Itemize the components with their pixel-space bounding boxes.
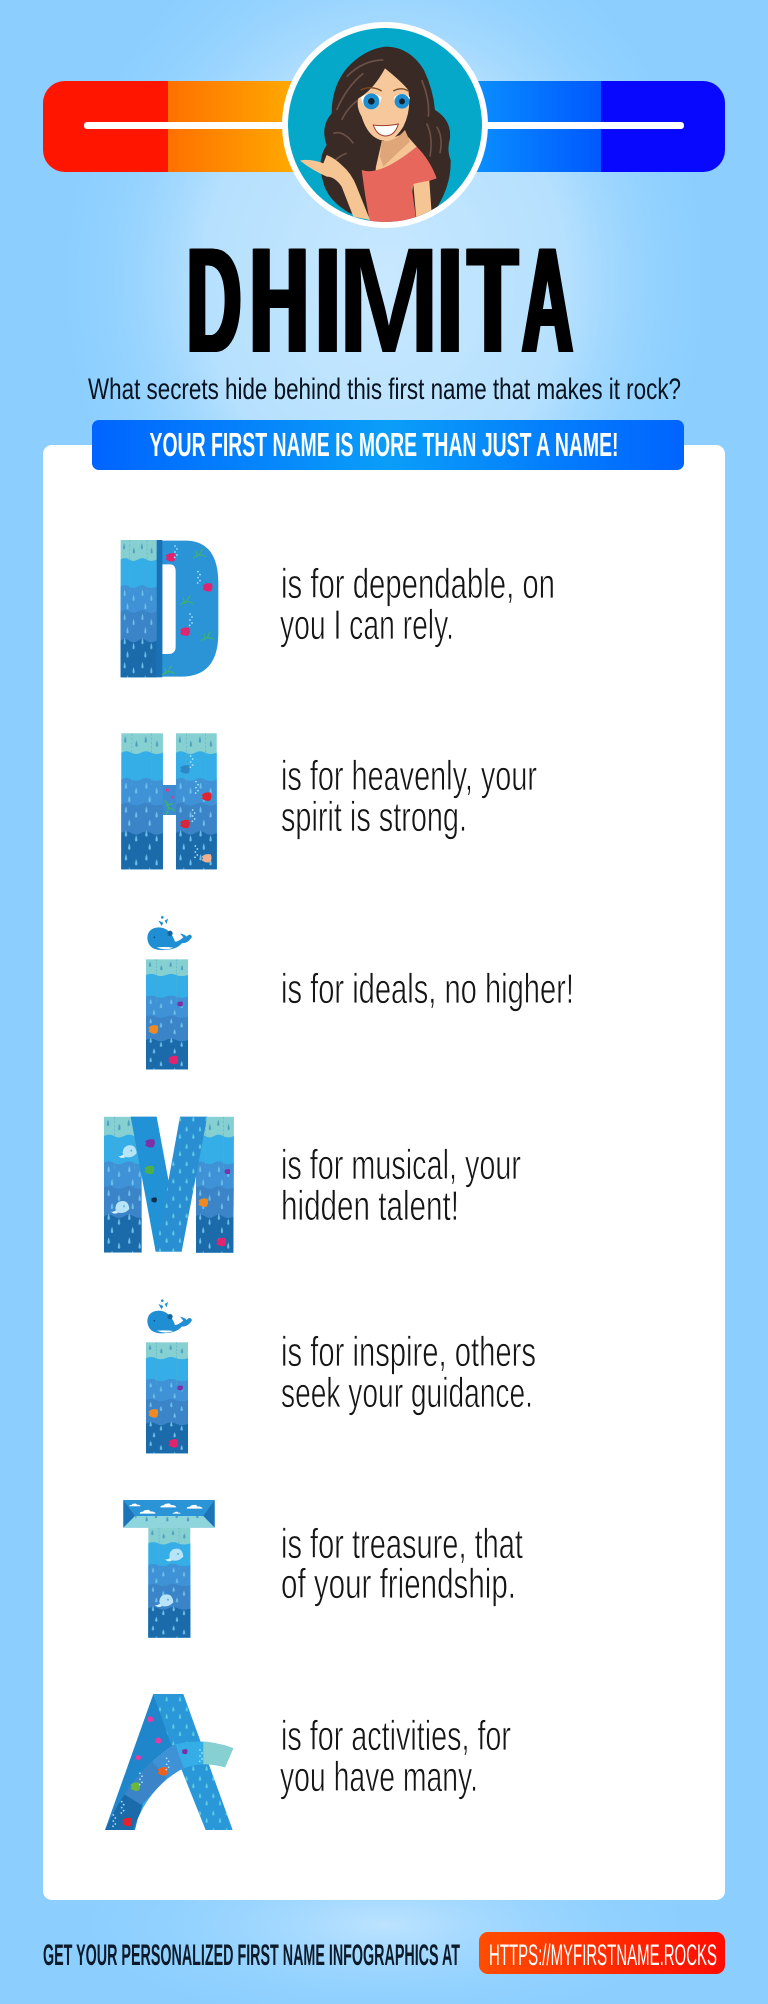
letter T text: is for treasure, that	[281, 1520, 523, 1567]
letter M text: is for musical, your	[281, 1141, 521, 1188]
second letter I text: is for inspire, others	[281, 1328, 536, 1375]
letter D text: you I can rely.	[280, 601, 454, 648]
letter I with whale	[146, 916, 192, 1069]
title: T	[468, 216, 517, 384]
letter T text	[281, 1520, 523, 1607]
letter H text: is for heavenly, your	[281, 752, 537, 799]
letter A text: you have many.	[280, 1753, 478, 1800]
letter A text: is for activities, for	[281, 1712, 511, 1759]
banner	[92, 420, 684, 470]
letter H	[121, 733, 217, 869]
letter D text: is for dependable, on	[281, 560, 555, 607]
letter H text	[281, 752, 537, 840]
letter I second with whale	[146, 1299, 192, 1453]
title: M	[337, 216, 441, 384]
title: I	[316, 216, 340, 384]
title	[187, 216, 574, 384]
letter D	[121, 540, 218, 677]
footer URL button	[479, 1932, 725, 1974]
letter M text: hidden talent!	[281, 1182, 459, 1229]
letter T text: of your friendship.	[281, 1560, 516, 1607]
icon: portrait of smiling woman	[282, 22, 488, 228]
letter D text	[280, 560, 555, 648]
letter T	[123, 1500, 215, 1638]
letter A	[105, 1694, 234, 1830]
letter M text	[281, 1141, 521, 1229]
panel: white content	[43, 420, 725, 1900]
header colour bar	[43, 81, 725, 172]
letter A text	[280, 1712, 511, 1800]
second letter I text	[281, 1328, 536, 1416]
letter H text: spirit is strong.	[281, 793, 467, 840]
letter I text: is for ideals, no higher!	[281, 965, 574, 1012]
title: H	[250, 216, 308, 384]
title: A	[522, 216, 573, 384]
letter M	[104, 1117, 234, 1253]
title: I	[438, 216, 462, 384]
second letter I text: seek your guidance.	[281, 1369, 533, 1416]
title: D	[187, 216, 241, 384]
